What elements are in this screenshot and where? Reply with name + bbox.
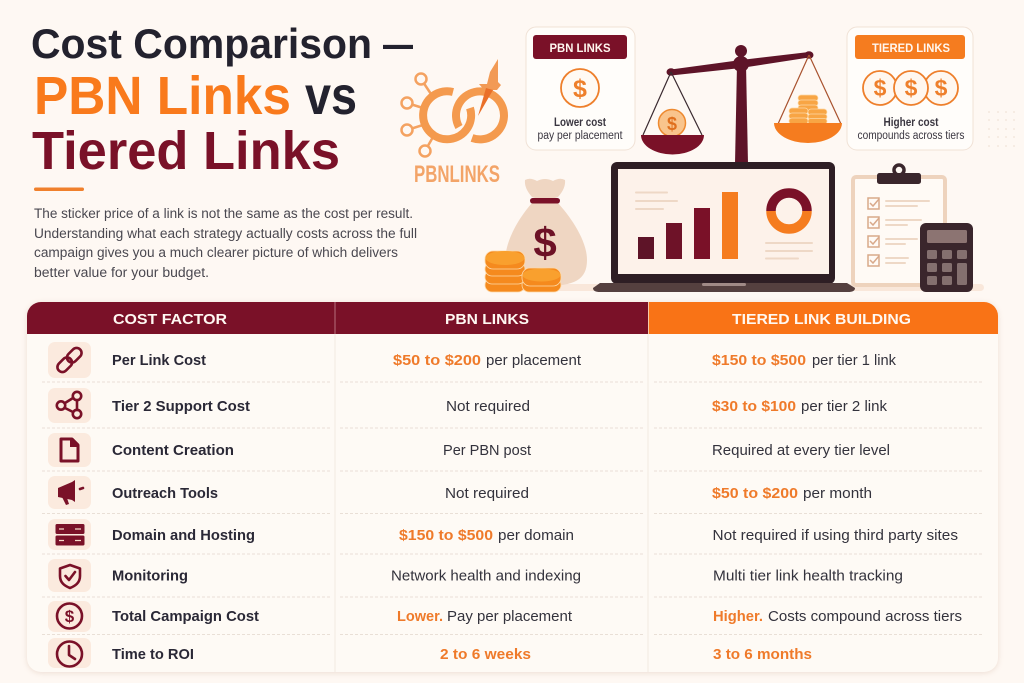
Tiered value: Higher. <box>713 609 763 625</box>
icon: megaphone <box>48 476 91 509</box>
PBN value: $150 to $500 <box>399 528 493 544</box>
PBN value <box>397 609 572 625</box>
illustration: calculator <box>920 223 973 292</box>
Tiered value: per month <box>803 486 872 502</box>
title underline accent <box>34 188 84 191</box>
title: Cost Comparison <box>31 20 372 67</box>
PBN value <box>393 353 581 369</box>
ground shadow <box>500 284 984 291</box>
PBN value: Lower. <box>397 609 443 625</box>
icon: server <box>48 519 91 550</box>
column and row dividers <box>42 334 983 672</box>
row: Tier 2 Support Cost <box>48 388 888 423</box>
laptop donut chart <box>771 193 807 229</box>
card: PBN links: Lower cost <box>554 117 606 129</box>
card: Tiered links: TIERED LINKS <box>872 41 950 55</box>
title: vs <box>305 66 357 126</box>
intro paragraph: Understanding what each strategy actually costs across the full <box>34 226 417 241</box>
row: Monitoring: Monitoring <box>112 568 188 584</box>
icon: document <box>48 433 91 467</box>
table header: TIERED LINK BUILDING <box>732 311 911 328</box>
table header <box>27 302 998 334</box>
Tiered value: $150 to $500 <box>712 353 806 369</box>
row: Per Link Cost <box>48 342 897 378</box>
title <box>31 20 413 181</box>
illustration: money bag: $ <box>533 219 557 266</box>
laptop text lines <box>636 192 812 258</box>
comparison table <box>27 302 998 672</box>
row: Content Creation <box>48 433 890 467</box>
Tiered value: $50 to $200 <box>712 486 798 502</box>
Tiered value: $30 to $100 <box>712 399 796 415</box>
PBNLINKS logo <box>402 59 504 188</box>
row: Outreach Tools: Outreach Tools <box>112 485 218 502</box>
icon: clock <box>48 638 91 668</box>
illustration: clipboard checklist <box>853 165 945 285</box>
Tiered value <box>712 353 897 369</box>
row: Monitoring <box>48 559 903 592</box>
title: Tiered Links <box>32 121 340 181</box>
icon: chain link <box>48 342 91 378</box>
intro paragraph <box>34 206 417 280</box>
PBN value: per domain <box>498 528 574 544</box>
card: PBN links: PBN LINKS <box>550 41 610 55</box>
card: PBN links: $ <box>573 75 587 103</box>
Tiered value: Multi tier link health tracking <box>713 568 903 584</box>
Tiered value: Not required if using third party sites <box>712 528 958 544</box>
Tiered value: Required at every tier level <box>712 443 890 459</box>
row: Total Campaign Cost <box>48 601 962 632</box>
PBN value: Not required <box>446 399 530 415</box>
PBN value: Per PBN post <box>443 443 531 459</box>
PBN value: $50 to $200 <box>393 353 481 369</box>
PBN value: 2 to 6 weeks <box>440 647 531 663</box>
row: Tier 2 Support Cost: Tier 2 Support Cost <box>112 398 250 415</box>
Tiered value <box>712 399 888 415</box>
row: Content Creation: Content Creation <box>112 442 234 459</box>
card: Tiered links: Higher cost <box>884 117 939 129</box>
row: Domain and Hosting <box>48 519 958 550</box>
laptop bar chart <box>638 192 738 259</box>
card: Tiered links: $ <box>935 75 948 101</box>
card: Tiered links <box>847 27 973 150</box>
card: Tiered links: $ <box>874 75 887 101</box>
Tiered value: Costs compound across tiers <box>768 609 962 625</box>
icon: shield check <box>48 559 91 592</box>
decorative dots <box>988 111 1015 147</box>
table header: COST FACTOR <box>113 311 227 328</box>
illustration: balance scale <box>641 45 842 164</box>
row: Time to ROI <box>48 638 812 668</box>
Tiered value: 3 to 6 months <box>713 647 812 663</box>
illustration: money bag <box>505 179 587 286</box>
PBN value: Pay per placement <box>447 609 572 625</box>
card: PBN links <box>526 27 635 150</box>
icon: share nodes <box>48 388 91 423</box>
row: Outreach Tools <box>48 476 872 509</box>
PBN value: per placement <box>486 353 581 369</box>
card: Tiered links: $ <box>905 75 918 101</box>
table header: PBN LINKS <box>445 311 529 328</box>
table panel <box>27 302 998 672</box>
Tiered value <box>712 486 872 502</box>
icon: dollar circle: $ <box>65 607 75 626</box>
card: PBN links: pay per placement <box>538 130 623 142</box>
illustration: laptop with charts <box>593 162 855 292</box>
illustration: coin stacks <box>485 251 561 292</box>
row: Time to ROI: Time to ROI <box>112 646 194 663</box>
row: Domain and Hosting: Domain and Hosting <box>112 527 255 544</box>
title: PBN Links <box>34 66 291 126</box>
row: Per Link Cost: Per Link Cost <box>112 352 206 369</box>
title: — <box>383 20 413 67</box>
intro paragraph: campaign gives you a much clearer picture of which delivers <box>34 245 398 260</box>
illustration: balance scale: $ <box>667 114 677 134</box>
icon: dollar circle <box>48 601 91 632</box>
PBN value: Not required <box>445 486 529 502</box>
card: Tiered links: compounds across tiers <box>858 130 965 142</box>
intro paragraph: The sticker price of a link is not the same as the cost per result. <box>34 206 413 221</box>
PBN value: Network health and indexing <box>391 568 581 584</box>
PBNLINKS logo: PBNLINKS <box>414 161 500 188</box>
Tiered value: per tier 1 link <box>812 353 897 369</box>
Tiered value: per tier 2 link <box>801 399 888 415</box>
row: Total Campaign Cost: Total Campaign Cost <box>112 608 259 625</box>
PBN value <box>399 528 574 544</box>
intro paragraph: better value for your budget. <box>34 265 209 280</box>
